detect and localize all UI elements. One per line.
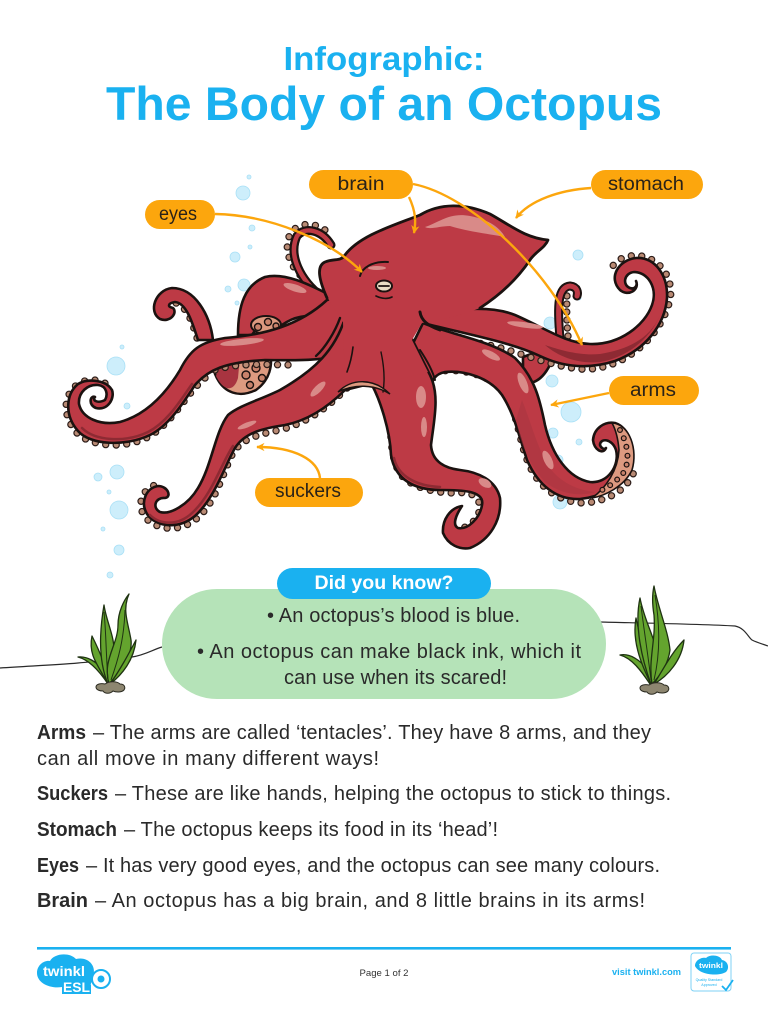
front arm: lower right [395, 323, 634, 503]
arrow: stomach [516, 188, 591, 218]
text: arms: Arms [37, 722, 86, 744]
quality badge: Approved [701, 983, 717, 987]
page number: Page 1 of 2 [360, 968, 408, 979]
footer logo: ESL [63, 979, 90, 995]
website link: visit twinkl.com [612, 967, 681, 978]
title: Infographic: [284, 40, 484, 77]
skin highlights [220, 215, 556, 490]
footer rule [37, 947, 731, 950]
eye [360, 262, 392, 298]
fact: ink [197, 641, 581, 689]
back arm: top thin curl [287, 224, 331, 297]
footer logo: twinkl [43, 963, 85, 979]
back arm: bulge with suckers [238, 276, 330, 335]
fact: ink: can use when its scared! [284, 667, 507, 689]
text: suckers: – These are like hands, helping the octopus to stick to things. [115, 783, 671, 805]
label: brain [309, 170, 413, 199]
text: eyes: – It has very good eyes, and the octopus can see many colours. [86, 855, 660, 877]
fact: blood: • An octopus’s blood is blue. [267, 605, 520, 627]
label: suckers [255, 478, 363, 507]
sea floor line left [0, 647, 162, 668]
text: arms: – The arms are called ‘tentacles’. They have 8 arms, and they [93, 722, 651, 744]
quality badge: twinkl [699, 961, 723, 970]
label: arms [609, 376, 699, 405]
arrow: brain to mantle [409, 197, 415, 233]
quality badge: Quality Standard [696, 978, 722, 982]
text: stomach: Stomach [37, 819, 117, 841]
text: arms [37, 722, 651, 770]
quality badge [691, 953, 733, 991]
text: arms: can all move in many different ways! [37, 748, 379, 770]
front arm: centre [370, 335, 500, 548]
arrow: eyes [215, 214, 362, 272]
label: brain: brain [338, 174, 384, 195]
text: eyes: Eyes [37, 855, 79, 877]
front arm: upper right [420, 256, 671, 369]
bubbles [94, 175, 583, 578]
arrow: brain to arm [413, 184, 582, 345]
front arm: upper left [66, 295, 345, 445]
heading: did you know [277, 568, 491, 599]
back arm: right thin curl [523, 286, 577, 383]
label: suckers: suckers [275, 481, 341, 502]
label: stomach: stomach [608, 174, 684, 195]
title [106, 40, 662, 130]
text: stomach: – The octopus keeps its food in its ‘head’! [124, 819, 498, 841]
back arm: left curl [154, 288, 213, 340]
label: eyes [145, 200, 215, 229]
front arm: lower left [141, 318, 385, 528]
seaweed left [78, 594, 136, 693]
panel: did you know [162, 568, 606, 699]
back arm: lower suckers [215, 352, 271, 394]
text: brain: – An octopus has a big brain, and 8 little brains in its arms! [95, 890, 645, 912]
label: stomach [591, 170, 703, 199]
body and mantle [316, 206, 548, 394]
seaweed right [620, 586, 684, 694]
octopus illustration [66, 206, 671, 548]
title: The Body of an Octopus [106, 77, 662, 130]
text: brain: Brain [37, 890, 88, 912]
footer logo [37, 954, 110, 995]
fact: ink: • An octopus can make black ink, which it [197, 641, 581, 663]
label: arms: arms [630, 380, 676, 401]
arrow: suckers [257, 447, 320, 478]
sea floor line right [600, 622, 768, 646]
label: eyes: eyes [159, 204, 197, 225]
text: suckers: Suckers [37, 783, 108, 805]
heading: did you know: Did you know? [314, 573, 454, 594]
arrow: arms [551, 393, 609, 405]
